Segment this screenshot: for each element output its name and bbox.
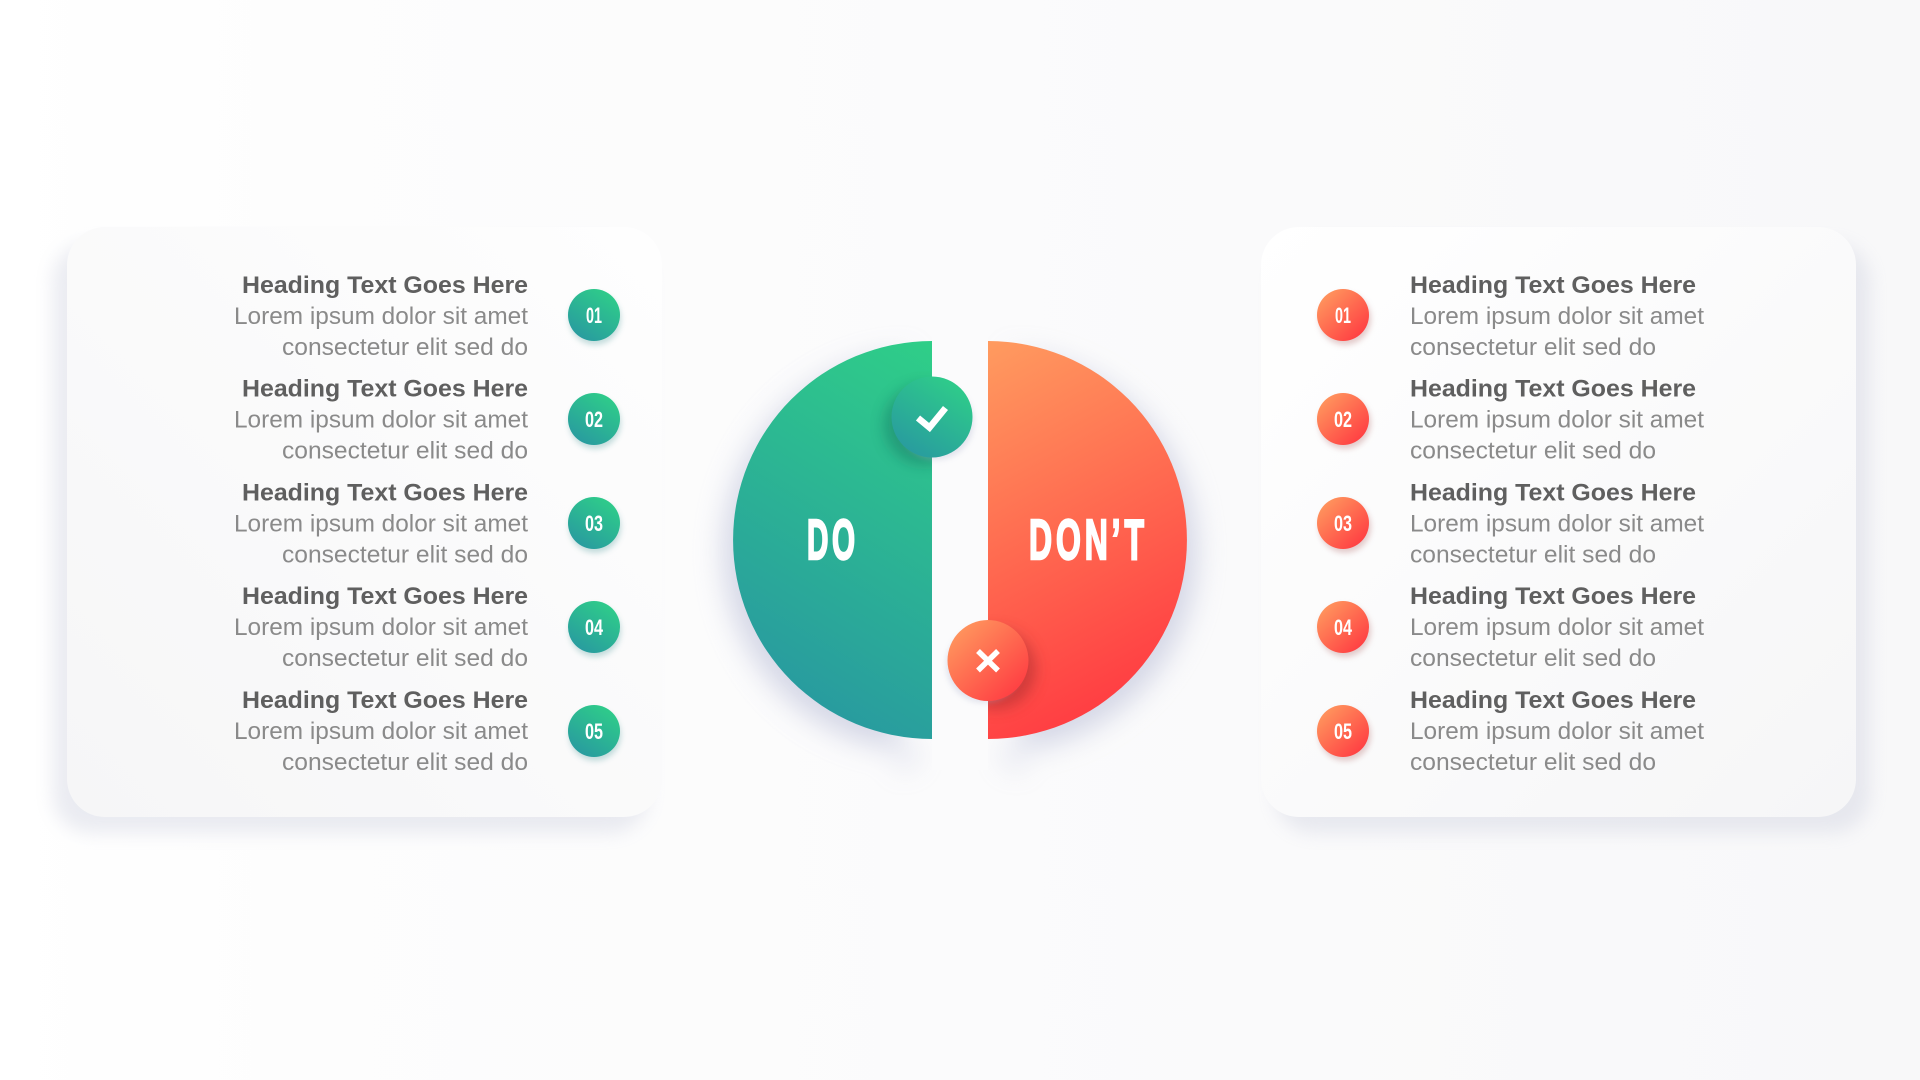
icon: cross badge: [946, 620, 1036, 709]
item 3: do: Heading Text Goes Here: [242, 479, 528, 506]
item 1: do: Heading Text Goes Here: [242, 272, 528, 299]
item 1: do: 01: [586, 303, 602, 328]
item 2: don't: [1317, 376, 1704, 465]
item 4: don't: 04: [1334, 615, 1353, 640]
item 4: do: Heading Text Goes Here: [242, 583, 528, 610]
item 1: do: consectetur elit sed do: [282, 334, 528, 361]
shadow: do half circle: [723, 353, 922, 773]
item 5: do: Lorem ipsum dolor sit amet: [234, 718, 528, 745]
item 1: don't: 01: [1335, 303, 1351, 328]
item 4: don't: Lorem ipsum dolor sit amet: [1410, 614, 1704, 641]
item 3: don't: Heading Text Goes Here: [1410, 479, 1696, 506]
item 5: don't: 05: [1334, 719, 1352, 744]
item 3: don't: [1317, 479, 1704, 568]
item 1: don't: Heading Text Goes Here: [1410, 272, 1696, 299]
centre gap: [932, 330, 988, 770]
item 3: don't: consectetur elit sed do: [1410, 541, 1656, 568]
item 1: do: Lorem ipsum dolor sit amet: [234, 303, 528, 330]
label: do: DO: [807, 508, 859, 572]
item 2: don't: consectetur elit sed do: [1410, 438, 1656, 465]
item 4: do: 04: [585, 615, 604, 640]
item 5: don't: Lorem ipsum dolor sit amet: [1410, 718, 1704, 745]
panel shadow: do list: [53, 243, 648, 833]
item 3: do: [234, 479, 621, 568]
item 5: don't: Heading Text Goes Here: [1410, 687, 1696, 714]
item 1: don't: consectetur elit sed do: [1410, 334, 1656, 361]
item 1: do: [234, 272, 621, 361]
item 3: do: 03: [585, 511, 603, 536]
panel card: do list: [67, 227, 662, 817]
item 5: do: 05: [585, 719, 603, 744]
item 1: don't: Lorem ipsum dolor sit amet: [1410, 303, 1704, 330]
item 3: don't: 03: [1334, 511, 1352, 536]
item 3: don't: Lorem ipsum dolor sit amet: [1410, 510, 1704, 537]
item 5: do: [234, 687, 621, 776]
item 4: don't: consectetur elit sed do: [1410, 645, 1656, 672]
item 4: don't: Heading Text Goes Here: [1410, 583, 1696, 610]
item 4: do: Lorem ipsum dolor sit amet: [234, 614, 528, 641]
item 2: do: consectetur elit sed do: [282, 438, 528, 465]
panel: do list: [53, 227, 662, 833]
shadow: don't half circle: [998, 353, 1197, 773]
item 4: do: consectetur elit sed do: [282, 645, 528, 672]
item 5: don't: consectetur elit sed do: [1410, 749, 1656, 776]
item 5: do: Heading Text Goes Here: [242, 687, 528, 714]
half circle: don't: [988, 341, 1187, 739]
item 4: don't: [1317, 583, 1704, 672]
item 2: do: [234, 376, 621, 465]
item 3: do: consectetur elit sed do: [282, 541, 528, 568]
icon: check badge: [884, 376, 974, 465]
item 2: don't: 02: [1334, 407, 1352, 432]
item 3: do: Lorem ipsum dolor sit amet: [234, 510, 528, 537]
item 2: don't: Lorem ipsum dolor sit amet: [1410, 407, 1704, 434]
half circle: do: [733, 341, 932, 739]
item 4: do: [234, 583, 621, 672]
item 5: don't: [1317, 687, 1704, 776]
label: don't: DON’T: [1029, 507, 1148, 571]
item 1: don't: [1317, 272, 1704, 361]
panel: don't list: [1261, 227, 1870, 833]
item 2: do: Lorem ipsum dolor sit amet: [234, 407, 528, 434]
panel shadow: don't list: [1275, 243, 1870, 833]
item 2: do: Heading Text Goes Here: [242, 376, 528, 403]
item 2: do: 02: [585, 407, 603, 432]
panel card: don't list: [1261, 227, 1856, 817]
item 5: do: consectetur elit sed do: [282, 749, 528, 776]
item 2: don't: Heading Text Goes Here: [1410, 376, 1696, 403]
